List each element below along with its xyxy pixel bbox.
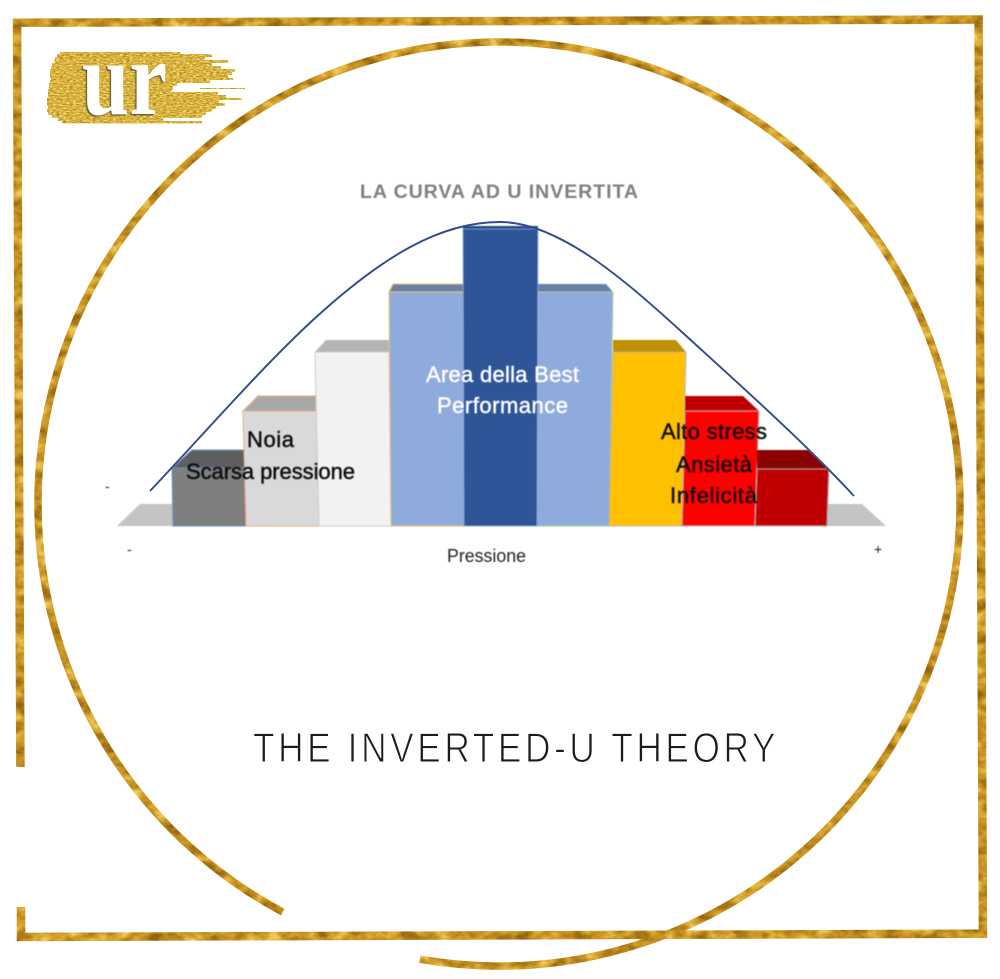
- label: scarsa pressione: Scarsa pressione: [186, 459, 355, 484]
- x axis title: Pressione: [447, 546, 526, 566]
- bar 4 light blue: [389, 284, 464, 526]
- label: area della best performance: Area della Best: [426, 362, 579, 387]
- label: noia: Noia: [247, 427, 295, 452]
- label: area della best performance: Performance: [437, 393, 568, 418]
- ur monogram: ur: [82, 20, 167, 137]
- bar 3 near-white: [315, 340, 391, 526]
- label: area della best performance: [426, 362, 579, 418]
- bars: [172, 226, 829, 526]
- floor: [117, 504, 886, 526]
- bar labels: [186, 362, 767, 508]
- inverted-U curve: [150, 222, 854, 496]
- y axis minus: -: [105, 478, 110, 494]
- label: alto stress ansieta infelicita: Alto stress: [661, 419, 767, 444]
- bar 5 dark blue: [463, 226, 538, 526]
- x axis plus: +: [874, 541, 882, 557]
- bar 2 light grey: [243, 396, 319, 526]
- bar 7 yellow: [609, 340, 686, 526]
- chart: la curva ad U invertita: [105, 181, 886, 566]
- bar 6 light blue: [537, 284, 613, 526]
- bar 9 dark red: [755, 450, 829, 526]
- axis labels: [105, 478, 882, 566]
- bar 1 grey: [172, 450, 246, 526]
- main title: THE INVERTED-U THEORY: [253, 725, 775, 772]
- chart title: LA CURVA AD U INVERTITA: [360, 181, 638, 203]
- label: alto stress ansieta infelicita: Infelicità: [670, 483, 758, 508]
- label: alto stress ansieta infelicita: [661, 419, 767, 508]
- label: alto stress ansieta infelicita: Ansietà: [676, 452, 753, 477]
- bar 8 red: [682, 396, 759, 526]
- gold brush stroke: [47, 52, 245, 123]
- logo: gold brush with ur monogram: [47, 20, 245, 137]
- x axis minus: -: [127, 541, 132, 557]
